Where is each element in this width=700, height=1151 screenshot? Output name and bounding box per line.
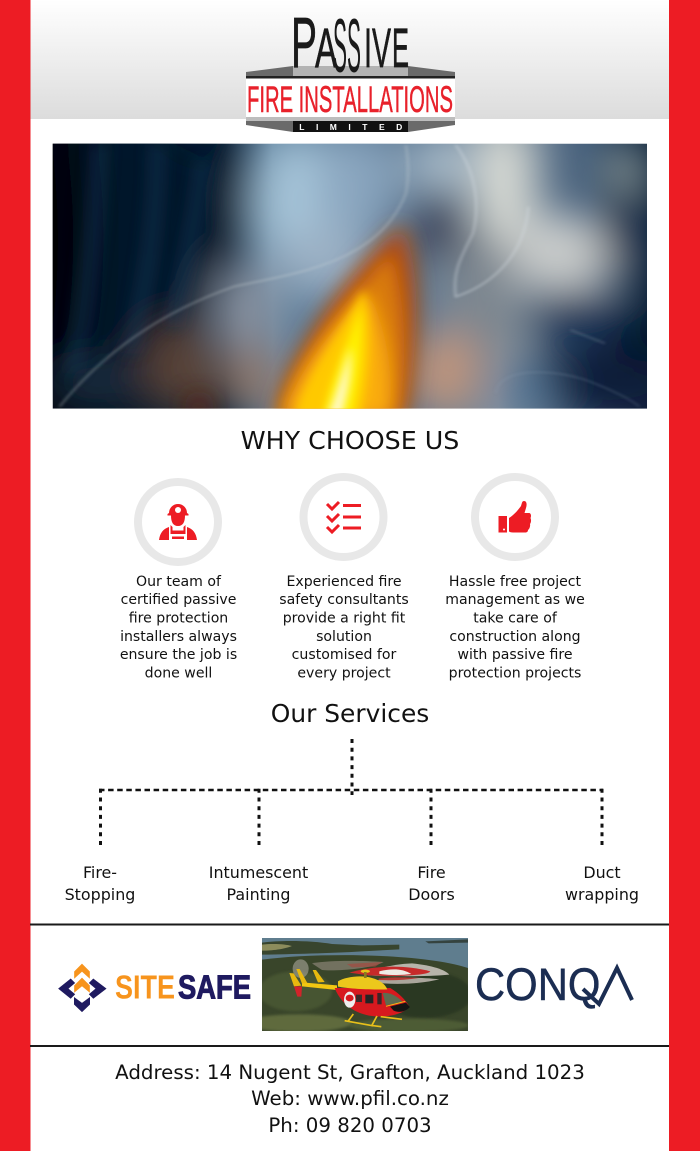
logo: Passive Fire Installations Limited: E xyxy=(392,16,409,79)
icon: worker xyxy=(138,482,218,562)
feature text: Experienced fire xyxy=(286,574,402,590)
divider above logos xyxy=(30,924,669,926)
service: intumescent painting: Intumescent xyxy=(209,863,308,882)
contact details xyxy=(115,1061,585,1137)
windows xyxy=(383,993,403,1005)
header band xyxy=(30,0,670,119)
feature text: protection projects xyxy=(449,666,581,682)
left red side bar xyxy=(0,0,30,1151)
logo: Passive Fire Installations Limited xyxy=(246,4,455,132)
feature text: safety consultants xyxy=(279,592,409,608)
logo: Site Safe: SAFE xyxy=(178,968,251,1006)
logo: Passive Fire Installations Limited: A xyxy=(315,16,337,79)
skids xyxy=(345,1014,402,1027)
feature: hassle free management xyxy=(445,477,585,682)
feature text: ensure the job is xyxy=(120,647,237,663)
logo: Site Safe: SITE xyxy=(115,968,175,1006)
tail xyxy=(302,982,337,990)
logo: Site Safe xyxy=(59,964,251,1012)
flame xyxy=(276,223,416,417)
service: duct wrapping: Duct xyxy=(583,863,621,882)
service: fire doors: Doors xyxy=(408,885,455,904)
feature text: customised for xyxy=(292,647,397,663)
emblem xyxy=(59,964,106,1012)
logo: Passive Fire Installations Limited: S xyxy=(333,4,347,89)
feature text: every project xyxy=(297,666,391,682)
service: fire doors: Fire xyxy=(417,863,446,882)
feature text: fire protection xyxy=(129,610,228,626)
address: Address: 14 Nugent St, Grafton, Auckland 1023 xyxy=(115,1061,585,1084)
feature text: Hassle free project xyxy=(449,574,582,590)
logo: Passive Fire Installations Limited: FIRE INSTALLATIONS xyxy=(247,79,453,120)
logo: Passive Fire Installations Limited: V xyxy=(372,16,391,79)
icon: thumbs up xyxy=(475,477,555,557)
logo: Passive Fire Installations Limited: S xyxy=(347,4,361,89)
feature text: take care of xyxy=(473,610,558,626)
feature: safety consultants xyxy=(279,477,409,682)
cabin xyxy=(335,988,409,1016)
smoke wisps xyxy=(60,145,639,407)
service: intumescent painting: Painting xyxy=(227,885,290,904)
photo: rescue helicopter xyxy=(262,938,468,1031)
feature text: Our team of xyxy=(136,574,222,590)
heading: our services: Our Services xyxy=(271,699,429,728)
logo: CONQA: CONQA xyxy=(475,959,601,1010)
logo: Passive Fire Installations Limited: LIMITED xyxy=(299,122,414,132)
right red side bar xyxy=(669,0,700,1151)
hero photo: flame and smoke xyxy=(52,144,647,409)
services tree connector xyxy=(99,739,603,845)
service: duct wrapping: wrapping xyxy=(565,885,639,904)
smoke masses xyxy=(52,144,647,409)
feature: certified installers xyxy=(120,482,237,682)
feature text: with passive fire xyxy=(457,647,573,663)
service: fire-stopping: Stopping xyxy=(65,885,135,904)
feature text: solution xyxy=(316,629,372,645)
feature text: construction along xyxy=(449,629,581,645)
divider below logos xyxy=(30,1045,669,1047)
website: Web: www.pfil.co.nz xyxy=(251,1087,449,1110)
heading: why choose us: WHY CHOOSE US xyxy=(241,426,459,455)
feature text: provide a right fit xyxy=(283,610,406,626)
logo: Passive Fire Installations Limited: P xyxy=(291,4,317,83)
vertical streaks xyxy=(73,144,203,373)
logo: Passive Fire Installations Limited: I xyxy=(364,16,372,79)
feature text: certified passive xyxy=(121,592,236,608)
rotor disc xyxy=(312,961,449,984)
icon: checklist xyxy=(304,477,384,557)
feature text: done well xyxy=(145,666,212,682)
feature text: installers always xyxy=(120,629,237,645)
service: fire-stopping: Fire- xyxy=(83,863,117,882)
feature text: management as we xyxy=(445,592,585,608)
phone: Ph: 09 820 0703 xyxy=(268,1114,432,1137)
